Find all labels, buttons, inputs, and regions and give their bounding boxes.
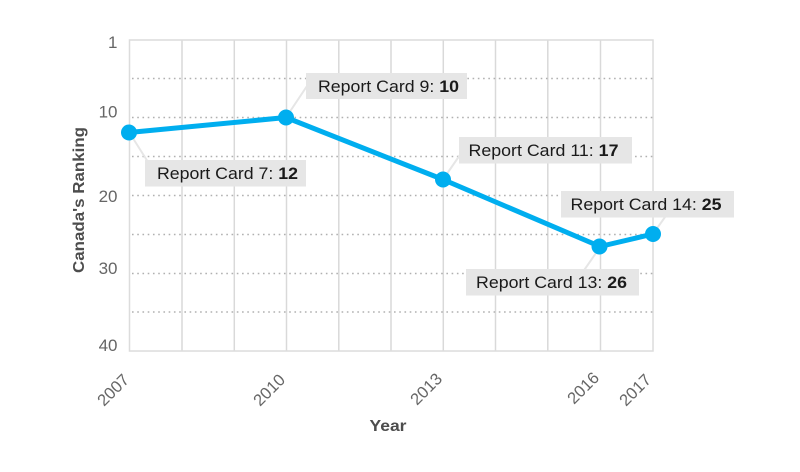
y-axis tick labels: 30 xyxy=(99,259,118,278)
x-axis title: Year xyxy=(370,418,406,435)
y-axis tick labels: 20 xyxy=(99,187,118,206)
x-axis tick labels: 2013 xyxy=(407,370,446,409)
x-axis tick labels: 2017 xyxy=(616,371,655,410)
x-axis tick labels xyxy=(94,369,655,410)
x-axis tick labels: 2010 xyxy=(250,371,289,410)
x-axis tick labels: 2016 xyxy=(564,369,603,408)
callout: Report Card 13: Report Card 13: 26 xyxy=(476,273,627,292)
data points xyxy=(121,110,661,254)
y-axis tick labels xyxy=(99,33,118,355)
y-axis tick labels: 10 xyxy=(99,102,118,122)
callout: Report Card 7: Report Card 7: 12 xyxy=(157,164,298,183)
data line xyxy=(129,118,653,246)
callout: Report Card 9: Report Card 9: 10 xyxy=(318,77,459,96)
plot grid xyxy=(130,40,654,351)
callout: Report Card 14 xyxy=(561,191,734,218)
callout: Report Card 9 xyxy=(306,73,467,99)
y-axis title: Canada's Ranking xyxy=(71,127,88,273)
callout: Report Card 11: Report Card 11: 17 xyxy=(468,141,618,160)
callout: Report Card 11 xyxy=(459,137,632,164)
callout leader lines xyxy=(129,86,670,279)
callout: Report Card 13 xyxy=(466,269,639,296)
callout: Report Card 7 xyxy=(145,160,306,186)
callout: Report Card 14: Report Card 14: 25 xyxy=(570,195,722,214)
y-axis tick labels: 1 xyxy=(108,33,118,52)
y-axis tick labels: 40 xyxy=(99,336,118,355)
x-axis tick labels: 2007 xyxy=(94,371,133,410)
